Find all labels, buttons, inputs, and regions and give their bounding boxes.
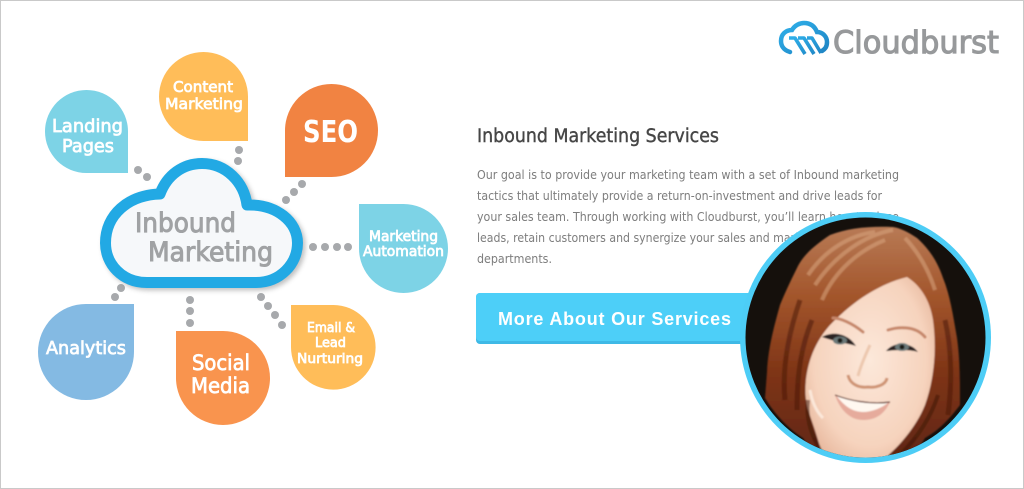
connector dots bbox=[111, 146, 352, 329]
bubble: content marketing bbox=[159, 52, 248, 141]
wordmark: Cloudburst bbox=[833, 25, 999, 61]
bubble: marketing automation: Automation bbox=[363, 244, 444, 260]
body paragraph: Our goal is to provide your marketing team with a set of Inbound marketing bbox=[477, 168, 899, 182]
bubble: seo bbox=[285, 84, 378, 177]
button: more about our services: More About Our Services bbox=[498, 309, 731, 329]
body paragraph: departments. bbox=[477, 252, 552, 266]
portrait photo bbox=[740, 212, 992, 475]
body paragraph: your sales team. Through working with Cloudburst, you’ll learn how to close bbox=[477, 210, 899, 224]
bubble: landing pages bbox=[45, 90, 128, 173]
bubble: marketing automation: Marketing bbox=[369, 229, 438, 245]
bubble: analytics bbox=[38, 304, 134, 400]
button: more about our services bbox=[476, 293, 776, 344]
central cloud: Inbound bbox=[135, 208, 236, 239]
bubble: social media bbox=[176, 331, 270, 425]
diagram: inbound marketing cloud bbox=[38, 52, 448, 425]
body paragraph: leads, retain customers and synergize your sales and marketing bbox=[477, 231, 829, 245]
bubble: seo: SEO bbox=[303, 115, 358, 150]
central cloud: Marketing bbox=[148, 237, 273, 268]
central cloud bbox=[106, 164, 300, 285]
bubble: landing pages: Landing bbox=[52, 116, 123, 137]
bubble: landing pages: Pages bbox=[62, 136, 114, 157]
icon: logo cloud bbox=[781, 23, 827, 54]
logo: cloudburst bbox=[781, 23, 999, 61]
bubble: email and lead nurturing: Nurturing bbox=[297, 351, 363, 367]
bubble: content marketing: Content bbox=[173, 78, 233, 96]
bubble: analytics: Analytics bbox=[46, 338, 126, 359]
bubble: social media: Social bbox=[192, 351, 250, 375]
bubble: social media: Media bbox=[191, 374, 250, 398]
body paragraph bbox=[477, 168, 899, 266]
bubble: marketing automation bbox=[359, 204, 448, 293]
bubble: email and lead nurturing bbox=[291, 305, 376, 390]
heading: Inbound Marketing Services bbox=[477, 126, 719, 147]
bubble: email and lead nurturing: Email & bbox=[307, 320, 355, 336]
bubble: content marketing: Marketing bbox=[165, 95, 243, 113]
body paragraph: tactics that ultimately provide a return-on-investment and drive leads for bbox=[477, 189, 882, 203]
bubble: email and lead nurturing: Lead bbox=[315, 335, 346, 351]
